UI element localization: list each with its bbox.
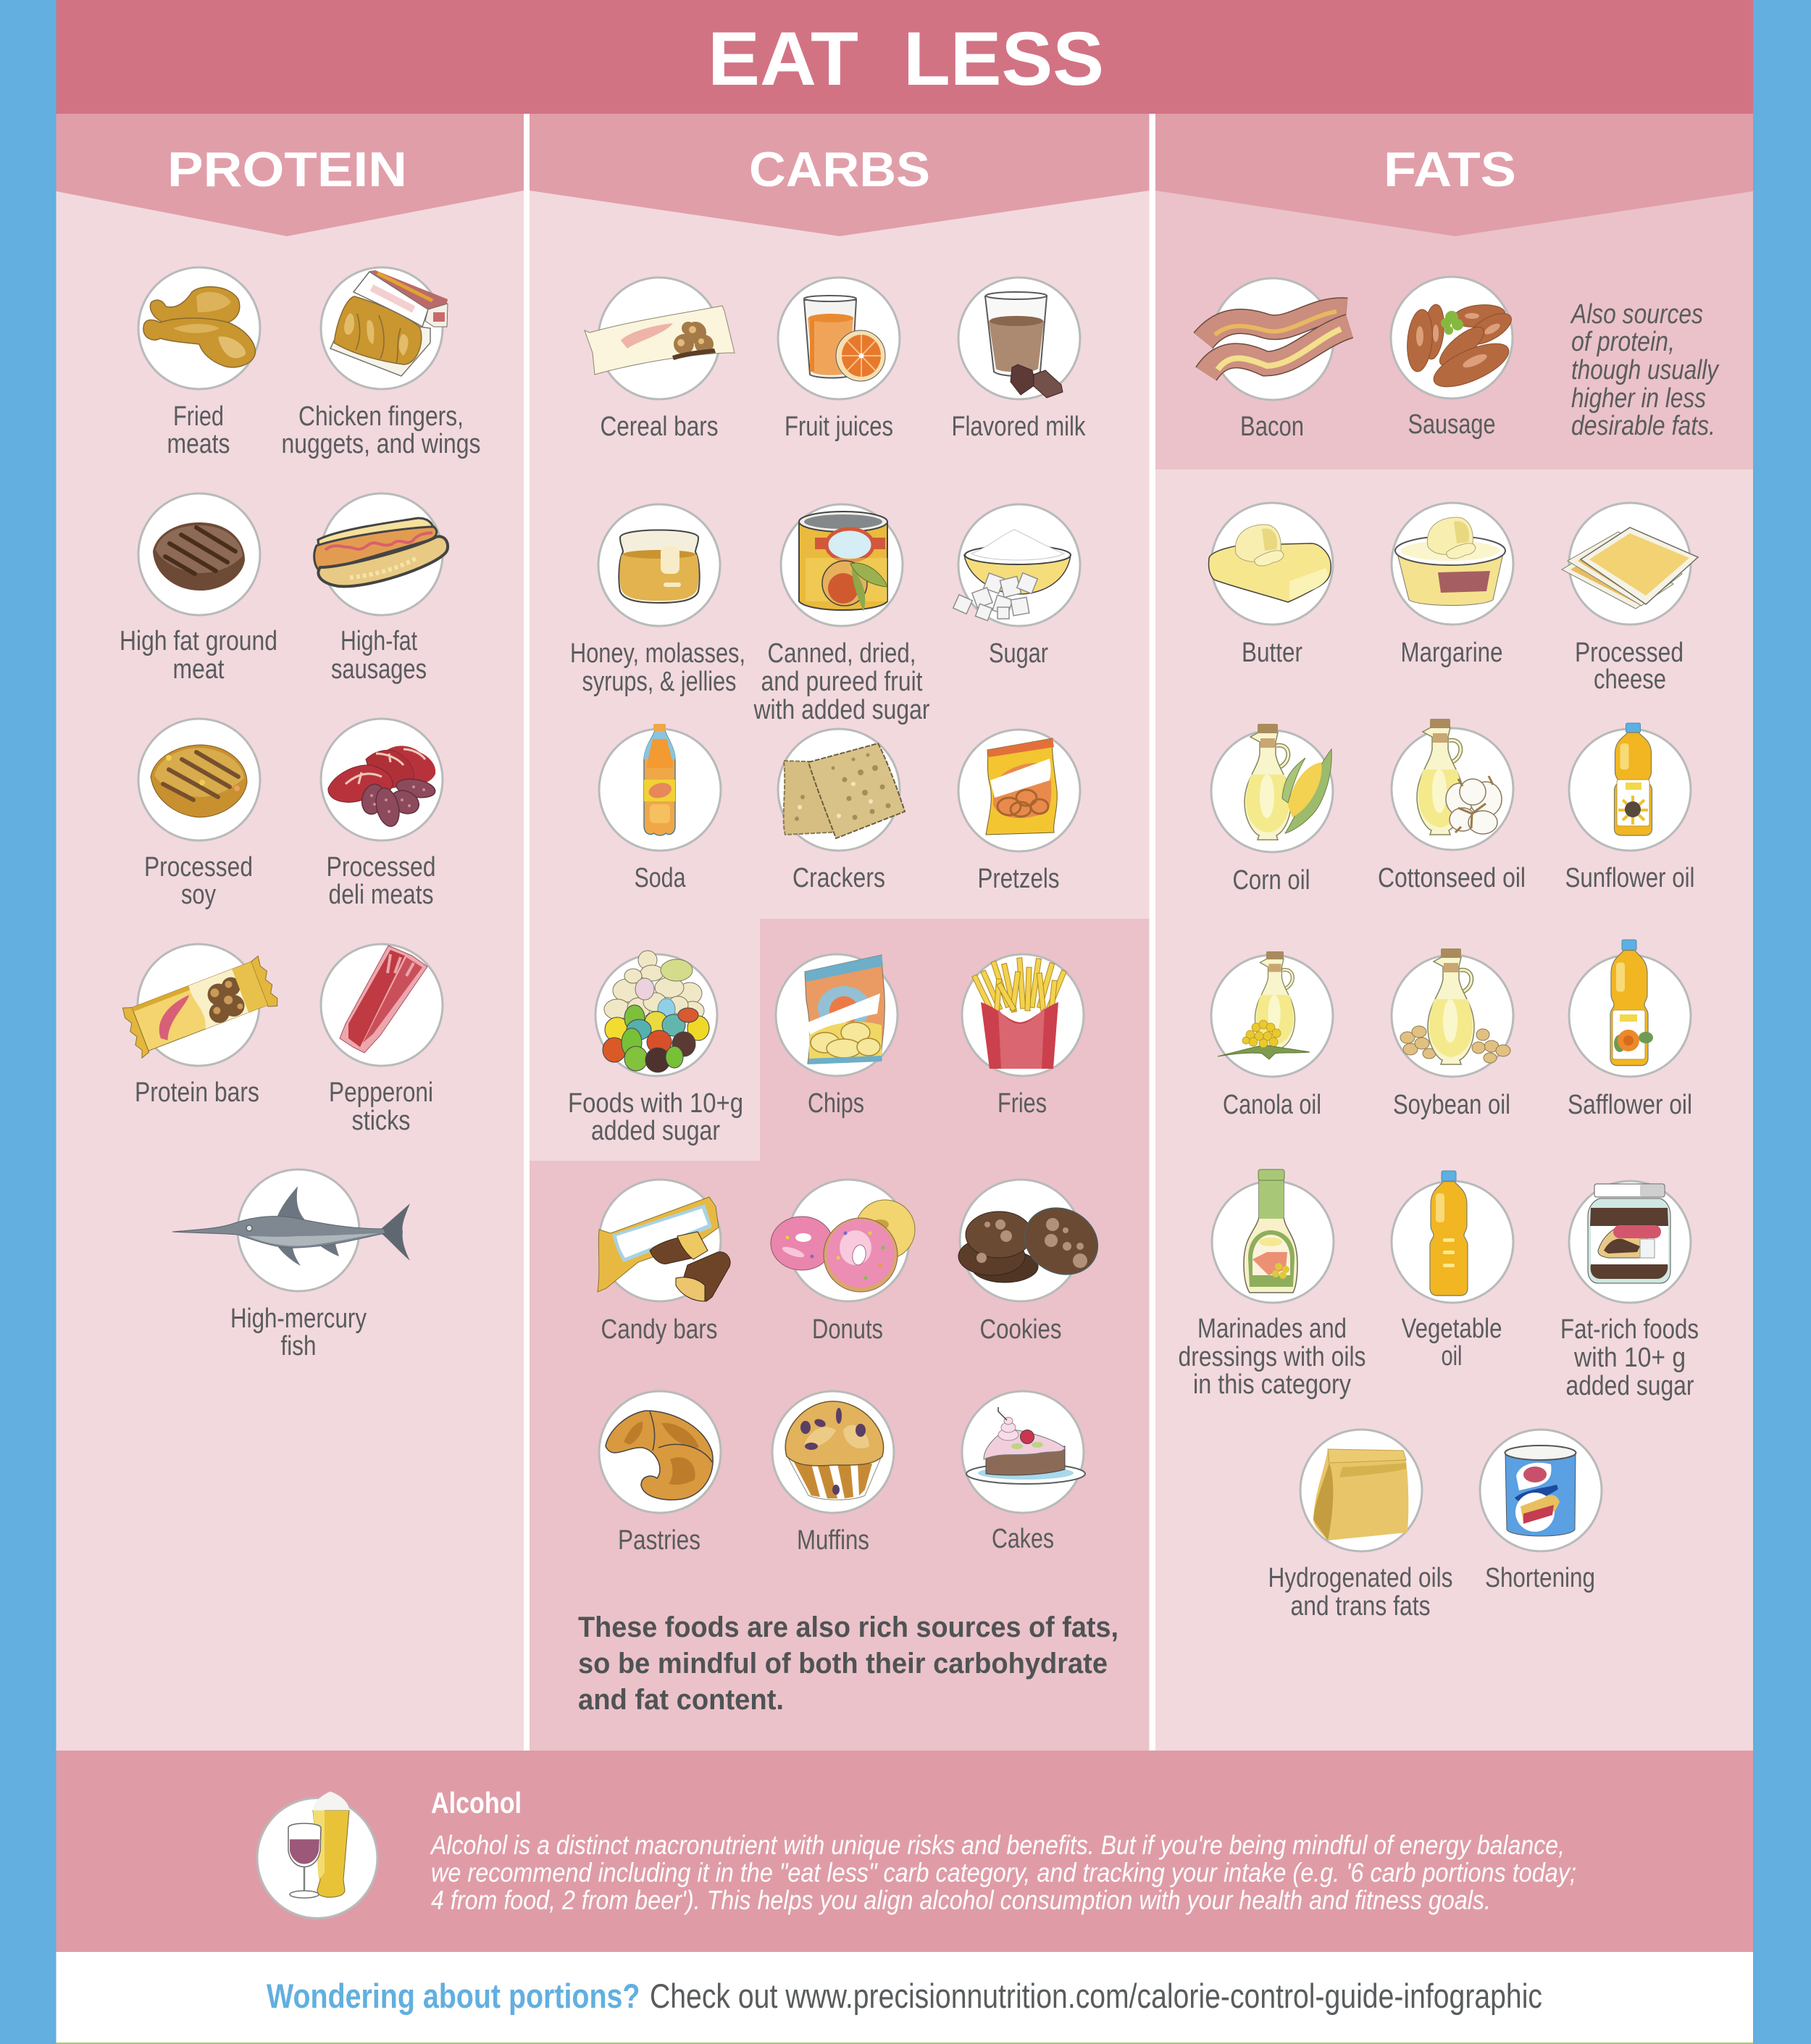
food: marinades	[1178, 1169, 1366, 1400]
label: vegetable oil	[1401, 1314, 1502, 1372]
icon: cottonseed oil	[1417, 719, 1502, 835]
header: fats: FATS	[1384, 142, 1516, 197]
protein-fat background	[1155, 114, 1753, 470]
food: processed cheese	[1562, 503, 1698, 695]
icon: beer and wine	[288, 1791, 349, 1898]
divider	[1149, 114, 1155, 1751]
label: foods with added sugar: Foods with 10+g	[568, 1088, 743, 1119]
food: cakes	[962, 1391, 1085, 1554]
food: processed soy	[138, 719, 260, 910]
note: fat-rich carbs	[578, 1611, 1118, 1716]
label: processed soy	[144, 852, 253, 910]
label: pepperoni sticks: Pepperoni	[329, 1077, 433, 1108]
title banner	[57, 0, 1753, 114]
label: soda: Soda	[635, 863, 686, 893]
label: sunflower oil: Sunflower oil	[1565, 863, 1695, 893]
food: foods with added sugar	[568, 951, 743, 1146]
food: sunflower oil	[1565, 723, 1695, 893]
label: sugar: Sugar	[989, 638, 1048, 669]
food: donuts	[771, 1180, 915, 1345]
label: high fat ground meat	[120, 626, 277, 685]
label: high-fat sausages: sausages	[331, 654, 427, 685]
icon: croissant	[606, 1411, 713, 1500]
icon: sausages	[1405, 302, 1516, 396]
icon: paper bag	[1313, 1449, 1408, 1540]
icon: canola oil	[1218, 951, 1310, 1059]
icon: margarine tub	[1395, 517, 1505, 606]
label: fries: Fries	[997, 1088, 1047, 1119]
label: butter: Butter	[1242, 638, 1302, 668]
icon: safflower oil	[1610, 940, 1653, 1066]
label: pepperoni sticks	[329, 1077, 433, 1136]
icon: candy bar	[598, 1197, 730, 1301]
title: EAT	[708, 17, 858, 101]
food: hydrogenated oils	[1268, 1430, 1453, 1622]
label: cookies: Cookies	[979, 1314, 1062, 1345]
label: hydrogenated oils	[1268, 1563, 1453, 1622]
label: margarine: Margarine	[1401, 638, 1502, 668]
label: fat-rich foods: added sugar	[1566, 1371, 1694, 1401]
label: high-mercury fish: High-mercury	[230, 1303, 367, 1334]
label: marinades	[1178, 1314, 1366, 1400]
food: safflower oil	[1568, 940, 1692, 1120]
icon: bacon	[1203, 310, 1350, 374]
food: cookies	[958, 1180, 1110, 1345]
note: fat-rich carbs: so be mindful of both their carbohydrate	[578, 1648, 1108, 1680]
icon: sunflower oil	[1614, 723, 1652, 835]
icon: chip bag	[805, 955, 884, 1064]
label: marinades: in this category	[1193, 1369, 1351, 1400]
label: candy bars: Candy bars	[601, 1314, 717, 1345]
label: foods with added sugar	[568, 1088, 743, 1146]
note: protein sources: higher in less	[1571, 383, 1706, 414]
note: fat-rich carbs: These foods are also rich sources of fats,	[578, 1611, 1118, 1643]
label: donuts: Donuts	[812, 1314, 883, 1345]
food: sugar	[953, 504, 1080, 669]
label: chicken fingers	[281, 401, 481, 459]
label: honey: Honey, molasses,	[570, 638, 745, 669]
title	[708, 17, 1104, 101]
alcohol body text: Alcohol is a distinct macronutrient with unique risks and benefits. But if you're being mindful of energy balance,	[430, 1830, 1565, 1860]
label: high fat ground meat: meat	[172, 654, 225, 685]
food: chips	[776, 954, 898, 1119]
label: high-fat sausages: High-fat	[340, 626, 417, 656]
icon: crackers	[784, 743, 905, 838]
label: fruit juices: Fruit juices	[785, 412, 893, 442]
icon: spread jar	[1588, 1184, 1670, 1283]
header: fats	[1155, 114, 1753, 236]
label: processed deli meats: deli meats	[329, 880, 433, 910]
label: soybean oil: Soybean oil	[1393, 1090, 1510, 1120]
food: crackers	[778, 729, 905, 893]
food: corn oil	[1211, 724, 1333, 896]
icon: cheese slices	[1562, 527, 1698, 609]
food: pretzels	[958, 730, 1080, 894]
icon: hot dog	[314, 518, 448, 586]
label: processed soy: Processed	[144, 852, 253, 883]
icon: shortening can	[1505, 1446, 1576, 1536]
food: cereal bars	[585, 278, 735, 442]
label: bacon: Bacon	[1240, 412, 1304, 442]
food: shortening	[1480, 1430, 1602, 1593]
label: fat-rich foods: Fat-rich foods	[1560, 1314, 1699, 1345]
label: chicken fingers: nuggets, and wings	[281, 429, 481, 459]
divider	[524, 114, 530, 1751]
alcohol body text: we recommend including it in the "eat less" carb category, and tracking your intake (e.g. '6 carb portions today;	[431, 1858, 1576, 1887]
icon: pepperoni sticks	[340, 946, 427, 1053]
food: candy bars	[598, 1180, 730, 1345]
food: fat-rich foods	[1560, 1181, 1699, 1401]
icon: chicken box	[330, 270, 448, 376]
food: high fat ground meat	[120, 493, 277, 685]
icon: juice and orange	[804, 296, 885, 381]
label: chips: Chips	[808, 1088, 864, 1119]
label: corn oil: Corn oil	[1233, 865, 1310, 896]
label: canned fruit	[753, 638, 930, 725]
icon: butter	[1209, 525, 1331, 602]
note: protein sources: desirable fats.	[1571, 411, 1715, 441]
icon: muffin	[785, 1401, 884, 1500]
food: honey	[570, 504, 745, 697]
label: sausage: Sausage	[1408, 409, 1495, 440]
icon: cookies	[958, 1196, 1110, 1287]
food: bacon	[1203, 278, 1350, 442]
food: muffins	[772, 1391, 894, 1556]
food: cottonseed oil	[1378, 719, 1526, 893]
icon: cereal bar	[585, 306, 735, 375]
food: fries	[962, 954, 1084, 1119]
icon: honey jar	[619, 530, 700, 603]
food: processed deli meats	[321, 719, 443, 910]
icon: french fries	[972, 958, 1066, 1069]
label: high-mercury fish: fish	[281, 1331, 316, 1361]
food: pepperoni sticks	[321, 944, 443, 1136]
icon: vegetable oil	[1430, 1171, 1468, 1296]
label: processed cheese: Processed	[1575, 638, 1684, 668]
icon: cake slice	[966, 1407, 1085, 1484]
icon: pretzel bag	[986, 738, 1057, 835]
label: processed cheese: cheese	[1594, 664, 1666, 695]
label: fried meats: meats	[167, 429, 230, 459]
label: foods with added sugar: added sugar	[591, 1116, 720, 1146]
header: carbs: CARBS	[749, 142, 930, 197]
label: high-mercury fish	[230, 1303, 367, 1361]
label: pastries: Pastries	[618, 1525, 700, 1556]
label: processed cheese	[1575, 638, 1684, 695]
food: soda	[599, 724, 721, 893]
icon: popcorn and candies	[603, 951, 709, 1072]
alcohol body text	[430, 1830, 1576, 1915]
label: canola oil: Canola oil	[1223, 1090, 1321, 1120]
icon: swordfish	[172, 1186, 410, 1266]
food: fried meats	[138, 267, 260, 459]
label: vegetable oil: oil	[1442, 1341, 1462, 1372]
label: muffins: Muffins	[797, 1525, 869, 1556]
label: fried meats	[167, 401, 230, 459]
label: processed soy: soy	[181, 880, 216, 910]
label: pretzels: Pretzels	[978, 864, 1059, 894]
icon: fried chicken	[143, 287, 255, 367]
label: marinades: Marinades and	[1197, 1314, 1347, 1344]
footer link text: Check out www.precisionnutrition.com/calorie-control-guide-infographic	[650, 1977, 1542, 2015]
food: protein bars	[122, 944, 280, 1108]
icon: sugar bowl and cubes	[953, 530, 1071, 621]
alcohol heading: Alcohol	[431, 1786, 522, 1819]
icon: canned fruit	[799, 512, 887, 612]
label: canned fruit: Canned, dried,	[768, 638, 916, 669]
title: LESS	[903, 17, 1104, 101]
food: sausage	[1391, 277, 1516, 440]
note: protein sources: of protein,	[1571, 327, 1675, 357]
label: processed deli meats	[326, 852, 436, 910]
label: cereal bars: Cereal bars	[600, 412, 719, 442]
label: cakes: Cakes	[992, 1524, 1054, 1554]
label: shortening: Shortening	[1485, 1563, 1595, 1593]
label: protein bars: Protein bars	[135, 1077, 259, 1108]
footer callout: Wondering about portions?	[267, 1977, 640, 2015]
icon: protein bar	[122, 955, 280, 1059]
label: high fat ground meat: High fat ground	[120, 626, 277, 656]
food: canned fruit	[753, 504, 930, 725]
note: protein sources: Also sources	[1570, 299, 1703, 330]
alcohol body text: 4 from food, 2 from beer'). This helps you align alcohol consumption with your health and fitness goals.	[431, 1885, 1491, 1915]
icon: meat patty	[153, 522, 245, 591]
icon: deli meats	[328, 746, 437, 829]
label: hydrogenated oils: Hydrogenated oils	[1268, 1563, 1453, 1593]
label: honey: syrups, & jellies	[582, 667, 736, 697]
food: high-fat sausages	[314, 493, 448, 685]
food: high-mercury fish	[172, 1169, 410, 1361]
panel: carbs	[530, 114, 1149, 1751]
icon: soybean oil	[1400, 948, 1510, 1064]
icon: donuts	[771, 1200, 915, 1292]
food: fruit juices	[778, 278, 900, 442]
label: crackers: Crackers	[792, 863, 885, 893]
label: processed deli meats: Processed	[326, 852, 436, 883]
note: protein sources: though usually	[1571, 355, 1720, 385]
label: canned fruit: with added sugar	[753, 695, 930, 725]
food: canola oil	[1211, 951, 1333, 1120]
note: fat-rich carbs: and fat content.	[578, 1684, 784, 1716]
label: cottonseed oil: Cottonseed oil	[1378, 863, 1526, 893]
food: pastries	[599, 1391, 721, 1556]
label: hydrogenated oils: and trans fats	[1291, 1591, 1430, 1622]
panel: alcohol	[57, 1751, 1753, 1952]
icon: soy patty	[151, 745, 247, 817]
label: marinades: dressings with oils	[1178, 1342, 1366, 1372]
food: soybean oil	[1392, 948, 1513, 1120]
label: safflower oil: Safflower oil	[1568, 1090, 1692, 1120]
label: high-fat sausages	[331, 626, 427, 685]
food: butter	[1209, 503, 1333, 668]
label: fried meats: Fried	[173, 401, 224, 432]
food: vegetable oil	[1392, 1171, 1513, 1372]
header: protein	[57, 114, 524, 236]
higher-fat carbs background	[530, 919, 1149, 1751]
icon: soda bottle	[644, 724, 675, 835]
label: chicken fingers: Chicken fingers,	[298, 401, 464, 432]
note: protein sources	[1570, 299, 1720, 441]
footer	[57, 1952, 1753, 2044]
panel: fats	[1155, 114, 1753, 1751]
label: honey	[570, 638, 745, 697]
food: flavored milk	[952, 278, 1086, 442]
label: vegetable oil: Vegetable	[1401, 1314, 1502, 1344]
header: protein: PROTEIN	[167, 142, 407, 197]
icon: corn oil	[1245, 724, 1331, 840]
panel: protein	[57, 114, 524, 1751]
label: canned fruit: and pureed fruit	[761, 667, 923, 697]
food: chicken fingers	[281, 267, 481, 459]
label: flavored milk: Flavored milk	[952, 412, 1086, 442]
header: carbs	[530, 114, 1149, 236]
icon: dressing bottle	[1244, 1169, 1297, 1293]
label: pepperoni sticks: sticks	[352, 1106, 410, 1136]
label: fat-rich foods: with 10+ g	[1573, 1343, 1686, 1373]
icon: chocolate milk	[985, 292, 1063, 398]
food: margarine	[1392, 503, 1513, 668]
label: fat-rich foods	[1560, 1314, 1699, 1401]
